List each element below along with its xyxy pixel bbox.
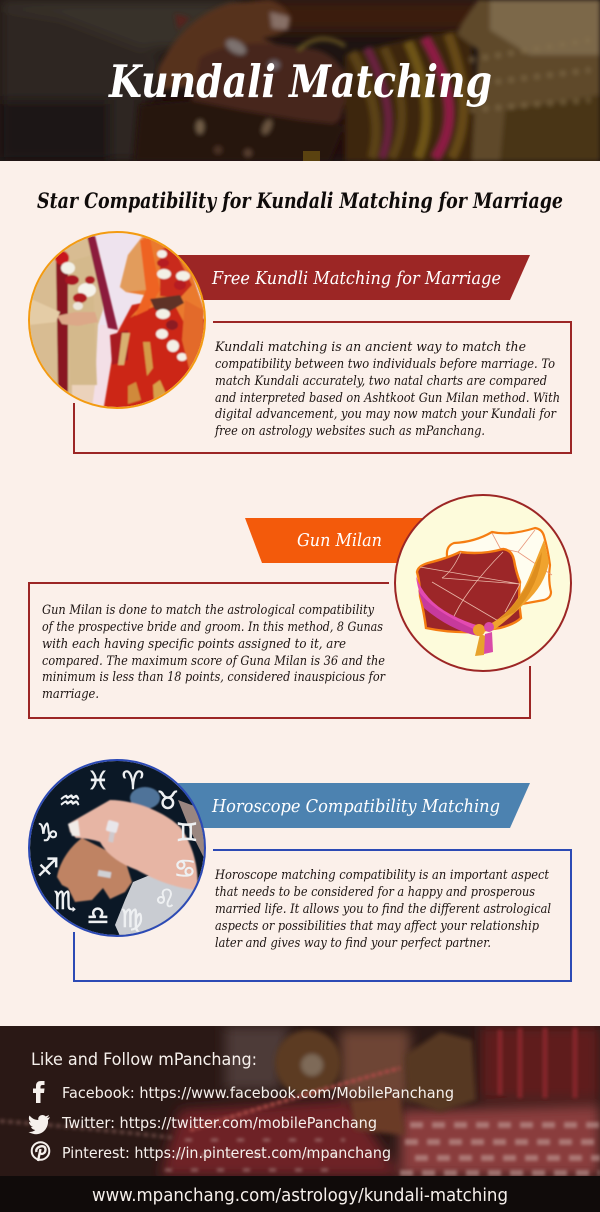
photo: hands with rings and zodiac signs — [29, 760, 205, 936]
panel: free kundli matching — [28, 232, 571, 453]
body text: aspects or possibilities that may affect your relationship — [215, 919, 539, 934]
photo: hands with rings and zodiac signs: ♒ — [59, 786, 81, 815]
row: twitter: Twitter: https://twitter.com/mobilePanchang — [61, 1114, 377, 1132]
panel: horoscope compatibility — [29, 760, 571, 981]
body text: of the prospective bride and groom. In this method, 8 Gunas — [42, 620, 383, 635]
ribbon: free kundli matching: Free Kundli Matching for Marriage — [211, 268, 501, 289]
photo: hands with rings and zodiac signs: ♊ — [176, 818, 198, 847]
photo: wedding couple — [28, 232, 212, 414]
ribbon: horoscope compatibility: Horoscope Compatibility Matching — [211, 796, 500, 817]
website url: www.mpanchang.com/astrology/kundali-matching — [92, 1185, 508, 1206]
photo: hands with rings and zodiac signs: ♌ — [154, 884, 176, 913]
body text: Kundali matching is an ancient way to match the — [214, 340, 526, 355]
photo: hands with rings and zodiac signs: ♋ — [174, 854, 196, 883]
body text: free on astrology websites such as mPanchang. — [214, 424, 485, 439]
body text — [214, 868, 551, 951]
icon: pinterest — [32, 1142, 49, 1161]
photo: hands with rings and zodiac signs: ♉ — [157, 786, 179, 815]
row: facebook: Facebook: https://www.facebook.com/MobilePanchang — [62, 1084, 454, 1102]
icon: twitter — [28, 1115, 50, 1134]
photo: hands with rings and zodiac signs: ♎ — [87, 901, 109, 930]
body text — [214, 340, 560, 439]
photo: hands with rings and zodiac signs: ♍ — [121, 904, 143, 933]
text frame — [29, 583, 530, 718]
photo: hands with rings and zodiac signs: ♓ — [87, 766, 109, 795]
body text: minimum is less than 18 points, considered inauspicious for — [42, 670, 386, 685]
text frame — [74, 322, 571, 453]
body text: marriage. — [42, 687, 99, 702]
ribbon: gun milan — [245, 518, 430, 563]
body text: Horoscope matching compatibility is an important aspect — [214, 868, 550, 883]
footer photo background — [0, 1026, 600, 1176]
footer heading: Like and Follow mPanchang: — [31, 1050, 257, 1070]
ribbon: gun milan: Gun Milan — [297, 530, 382, 551]
photo: hands with rings and zodiac signs: ♈ — [122, 766, 144, 795]
photo: hands with rings and zodiac signs: ♐ — [37, 853, 59, 882]
panel: gun milan — [29, 495, 571, 718]
paper background — [0, 161, 600, 1026]
photo: hands with rings and zodiac signs: ♏ — [54, 886, 76, 915]
body text — [42, 603, 386, 702]
body text: later and gives way to find your perfect partner. — [215, 936, 491, 951]
illustration: kundli charts tied with sash — [395, 495, 571, 671]
body text: that needs to be considered for a happy and prosperous — [215, 885, 535, 900]
photo: hands with rings and zodiac signs: ♑ — [37, 818, 59, 847]
header banner photo — [0, 0, 600, 161]
body text: with each having specific points assigned to it, are — [42, 637, 346, 652]
text frame — [74, 850, 571, 981]
icon: facebook — [33, 1081, 44, 1103]
ribbon: horoscope compatibility — [178, 783, 530, 828]
ribbon: free kundli matching — [178, 255, 530, 300]
bottom url bar background — [0, 1176, 600, 1212]
title: Kundali Matching — [107, 56, 492, 108]
row: pinterest: Pinterest: https://in.pinterest.com/mpanchang — [62, 1144, 391, 1162]
body text: married life. It allows you to find the different astrological — [215, 902, 551, 917]
body text: match Kundali accurately, two natal charts are compared — [215, 374, 547, 389]
body text: Gun Milan is done to match the astrological compatibility — [42, 603, 374, 618]
body text: compared. The maximum score of Guna Milan is 36 and the — [42, 654, 385, 669]
